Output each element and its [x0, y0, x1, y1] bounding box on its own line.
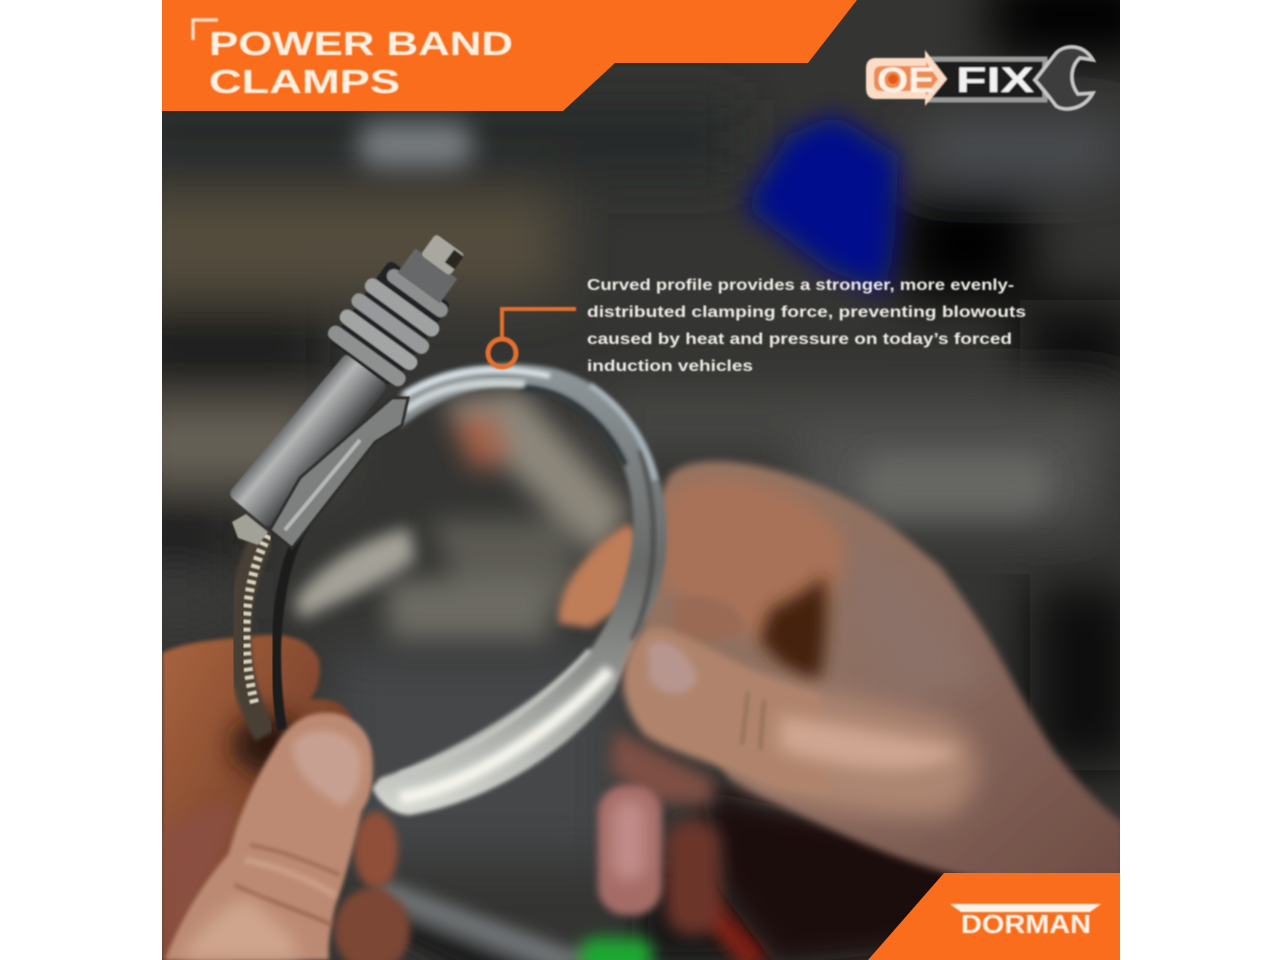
callout text: distributed clamping force, preventing blowouts [587, 304, 1026, 321]
blurred blue object [745, 115, 898, 292]
clamp: perforated strap [239, 520, 308, 735]
clamp: screw housing [228, 352, 388, 529]
infographic [162, 0, 1120, 960]
callout text: Curved profile provides a stronger, more evenly- [587, 277, 1014, 294]
title [193, 20, 513, 100]
Dorman logo [950, 904, 1101, 939]
band clamp ring [372, 364, 667, 815]
right hand: back and fingers [559, 461, 1125, 960]
header banner [162, 0, 857, 111]
title: CLAMPS [209, 63, 400, 100]
title: POWER BAND [209, 25, 513, 62]
left hand: fingers [162, 635, 410, 960]
callout text: induction vehicles [587, 358, 753, 375]
callout: leader line and marker [488, 309, 576, 367]
OE FIX logo: FIX [956, 61, 1035, 100]
clamp: lower collar [232, 514, 268, 545]
Dorman logo: DORMAN [961, 909, 1091, 939]
clamp: threaded worm [327, 234, 464, 388]
OE FIX logo: OE [877, 61, 935, 100]
right hand: thumb [623, 628, 976, 817]
callout text: caused by heat and pressure on today’s forced [587, 331, 1012, 348]
clamp: bridge plate [270, 398, 408, 548]
OE FIX logo [866, 47, 1093, 109]
left hand: thumb [165, 713, 373, 960]
corner tab [868, 873, 1120, 960]
callout text [587, 277, 1026, 375]
